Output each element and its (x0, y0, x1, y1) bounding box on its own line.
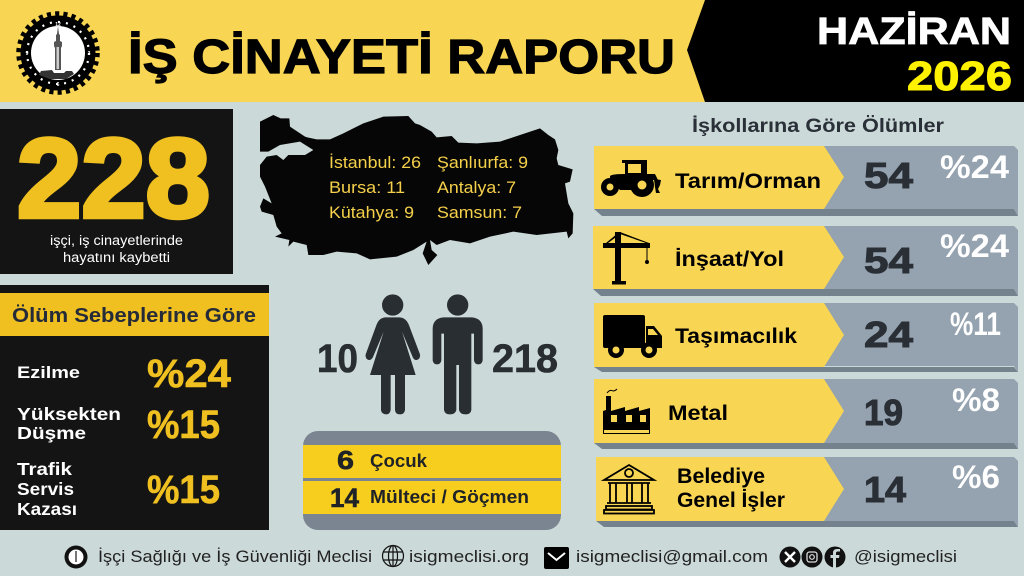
icon: public building (604, 465, 654, 514)
icon: woman (366, 294, 420, 414)
icon: tractor (601, 160, 661, 197)
label: agriculture: Tarım/Orman (675, 170, 821, 193)
migrants row: 14 (330, 483, 359, 513)
cause: fall from height (17, 403, 220, 447)
footer (64, 546, 957, 569)
icon: small logo (64, 546, 88, 568)
total caption: hayatını kaybetti (63, 250, 170, 265)
row: metal (594, 379, 1018, 449)
cause: traffic accident: Kazası (17, 499, 77, 519)
children row: 6 (337, 445, 354, 475)
top cities list: Kütahya: 9 (329, 203, 414, 222)
top cities list: Samsun: 7 (437, 203, 522, 222)
cause: traffic accident: Trafik (17, 459, 72, 479)
icon: globe (382, 546, 404, 566)
panel: Turkey map with cities (260, 115, 573, 265)
email: isigmeclisi@gmail.com (576, 547, 768, 566)
cause: crushing: %24 (147, 352, 232, 396)
icon: truck (603, 315, 662, 358)
cause: fall from height: Düşme (17, 423, 86, 443)
top cities list: Antalya: 7 (437, 178, 516, 197)
percent: agriculture: %24 (940, 149, 1009, 185)
children row (337, 445, 428, 475)
label: metal: Metal (668, 402, 728, 425)
cause: traffic accident (17, 459, 220, 519)
icon: factory (603, 389, 650, 434)
sector heading: İşkollarına Göre Ölümler (692, 116, 945, 137)
header band (0, 0, 1024, 102)
percent: metal: %8 (952, 382, 1000, 418)
row: municipal (596, 457, 1018, 527)
children row: Çocuk (370, 450, 428, 471)
total caption (50, 233, 183, 265)
percent: municipal: %6 (952, 459, 1000, 495)
cause: traffic accident: Servis (17, 479, 74, 499)
panel: total deaths (0, 109, 233, 274)
value: transport: 24 (864, 314, 913, 355)
website: isigmeclisi.org (409, 547, 529, 566)
month: HAZİRAN (817, 11, 1011, 53)
percent: construction: %24 (940, 228, 1009, 264)
female count: 10 (317, 337, 358, 381)
male count: 218 (492, 337, 558, 381)
social handle: @isigmeclisi (854, 547, 957, 566)
organisation name: İşçi Sağlığı ve İş Güvenliği Meclisi (98, 547, 372, 566)
icon: crane (603, 232, 650, 284)
total number: 228 (17, 116, 210, 241)
top cities list: İstanbul: 26 (329, 153, 421, 172)
migrants row (330, 483, 529, 513)
row: agriculture (594, 146, 1018, 216)
panel: gender breakdown (317, 294, 558, 414)
icon: man (433, 294, 483, 414)
label: municipal: Belediye (677, 465, 765, 488)
panel: children and migrants (303, 431, 561, 530)
top cities list: Şanlıurfa: 9 (437, 153, 528, 172)
logo: clock tower gear: 6 (57, 82, 60, 88)
cause: fall from height: %15 (147, 403, 220, 447)
year: 2026 (907, 53, 1012, 99)
panel: causes of death (0, 285, 269, 530)
causes heading: Ölüm Sebeplerine Göre (12, 304, 256, 327)
panel: deaths by sector (593, 116, 1018, 527)
label: municipal (677, 465, 785, 512)
top cities list: Bursa: 11 (329, 178, 405, 197)
label: construction: İnşaat/Yol (675, 248, 784, 271)
icons: social media (780, 546, 846, 568)
row: transport (594, 303, 1018, 372)
value: metal: 19 (864, 392, 903, 433)
cause: fall from height: Yüksekten (17, 404, 121, 424)
migrants row: Mülteci / Göçmen (370, 486, 529, 507)
logo: clock tower gear (20, 15, 96, 91)
map of Turkey (260, 115, 573, 265)
logo: clock tower gear: 3 (88, 51, 91, 57)
percent: transport: %11 (950, 306, 1001, 342)
cause: crushing: Ezilme (17, 363, 80, 382)
top cities list (329, 153, 528, 222)
total caption: işçi, iş cinayetlerinde (50, 233, 183, 248)
logo: clock tower gear: 12 (55, 22, 61, 28)
value: municipal: 14 (864, 469, 906, 510)
cause: crushing (17, 352, 232, 396)
cause: traffic accident: %15 (147, 468, 220, 512)
logo: clock tower gear: 9 (26, 51, 29, 57)
label: municipal: Genel İşler (677, 489, 785, 512)
title: İŞ CİNAYETİ RAPORU (128, 31, 675, 84)
icon: envelope (544, 547, 569, 569)
value: agriculture: 54 (864, 155, 913, 196)
value: construction: 54 (864, 240, 913, 281)
label: transport: Taşımacılık (675, 325, 797, 348)
row: construction (593, 226, 1018, 296)
